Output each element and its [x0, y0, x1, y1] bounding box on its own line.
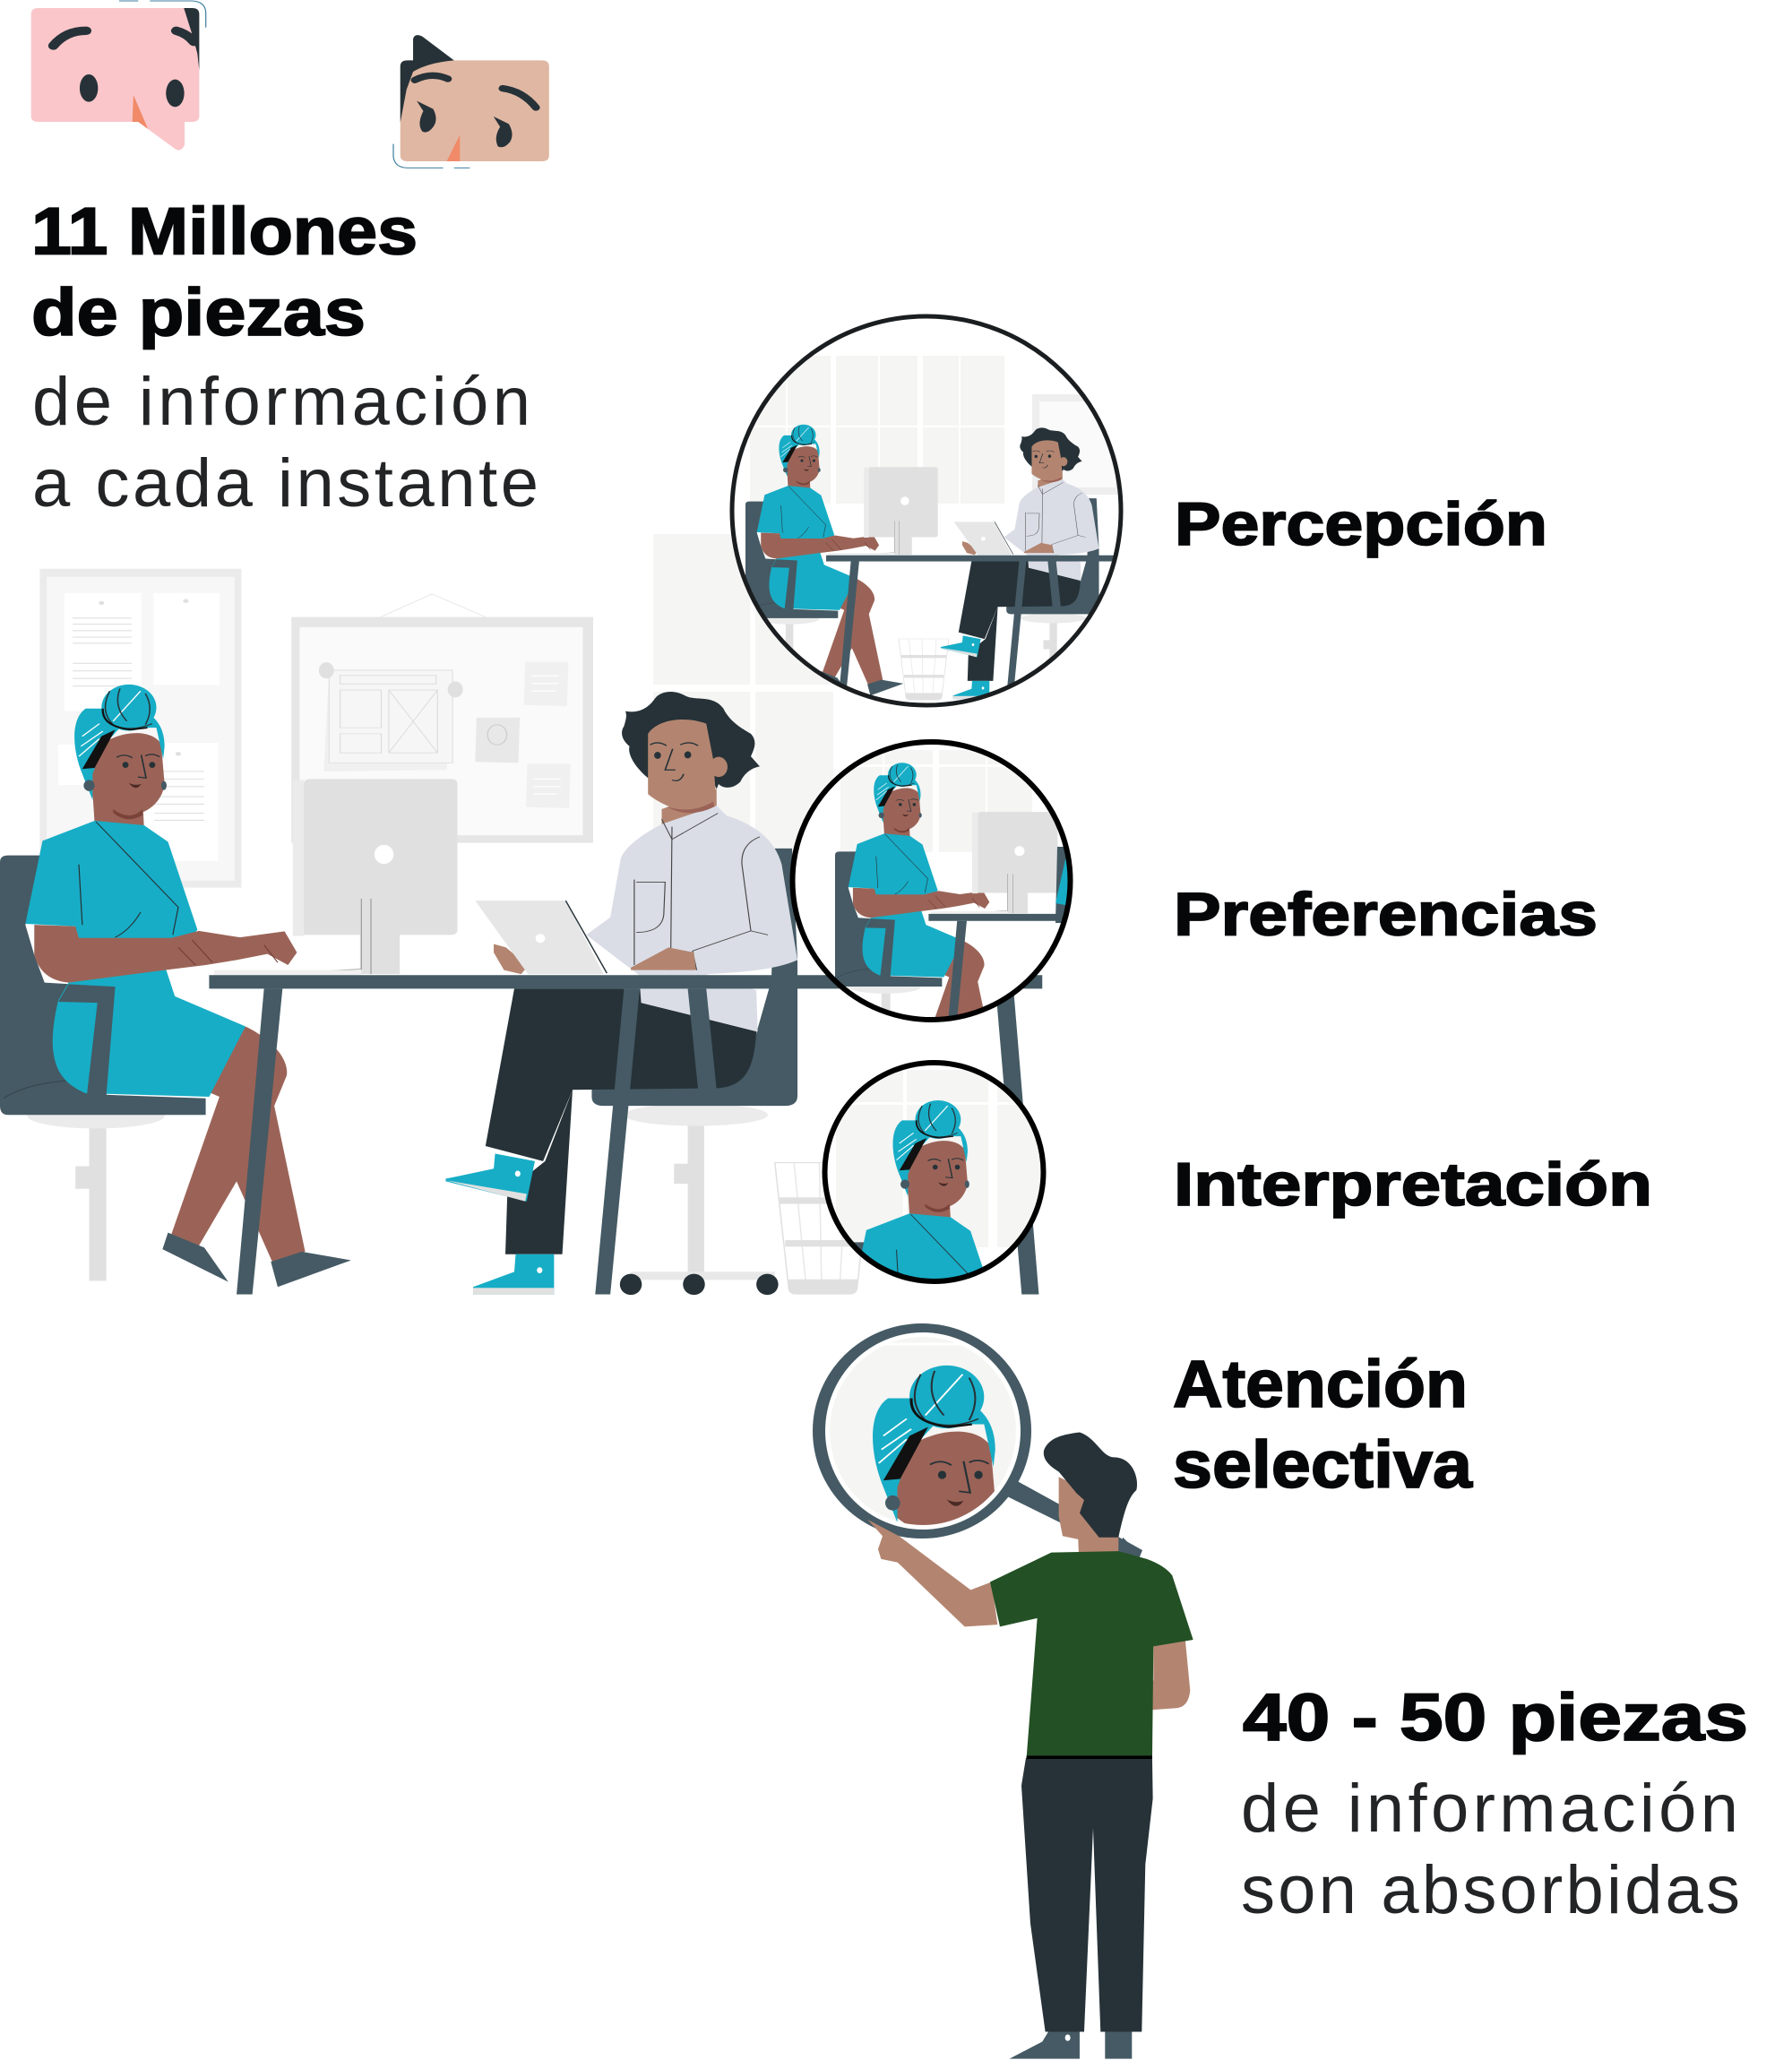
label: atención selectiva: Atención	[1173, 1347, 1468, 1421]
person holding magnifying glass	[867, 1432, 1193, 2059]
magnifying glass with woman's face	[813, 1323, 1142, 1561]
desk with monitor	[209, 779, 1042, 1295]
icon: tan speech bubble face	[393, 35, 549, 168]
text: 40 - 50 piezas de información son absorbidas: son absorbidas	[1241, 1852, 1740, 1928]
heading: 11 millones de piezas: de información	[32, 364, 530, 440]
label: atención selectiva: selectiva	[1173, 1427, 1473, 1502]
circle: percepción view	[729, 314, 1124, 708]
icon: pink speech bubble face	[31, 1, 206, 151]
label: interpretación: Interpretación	[1174, 1151, 1652, 1219]
text: 40 - 50 piezas de información son absorbidas	[1241, 1680, 1748, 1928]
waste bin	[775, 1163, 871, 1295]
heading: 11 millones de piezas: 11 Millones	[31, 194, 418, 269]
heading: 11 millones de piezas	[31, 194, 538, 521]
wireframe board	[291, 594, 593, 843]
corkboard with pinned papers	[39, 569, 241, 888]
circle: preferencias view	[790, 739, 1073, 1022]
man at desk	[445, 692, 797, 1295]
heading: 11 millones de piezas: de piezas	[31, 275, 366, 349]
woman at desk	[0, 685, 351, 1287]
circle: interpretación view	[823, 1060, 1047, 1284]
illustration: office scene with two people	[0, 534, 1042, 1295]
text: 40 - 50 piezas de información son absorbidas: 40 - 50 piezas	[1243, 1680, 1748, 1754]
label: preferencias: Preferencias	[1174, 880, 1598, 948]
label: percepción: Percepción	[1175, 490, 1547, 558]
label: atención selectiva	[1173, 1347, 1473, 1502]
window background	[653, 534, 833, 907]
text: 40 - 50 piezas de información son absorbidas: de información	[1241, 1771, 1738, 1847]
heading: 11 millones de piezas: a cada instante	[32, 445, 538, 521]
